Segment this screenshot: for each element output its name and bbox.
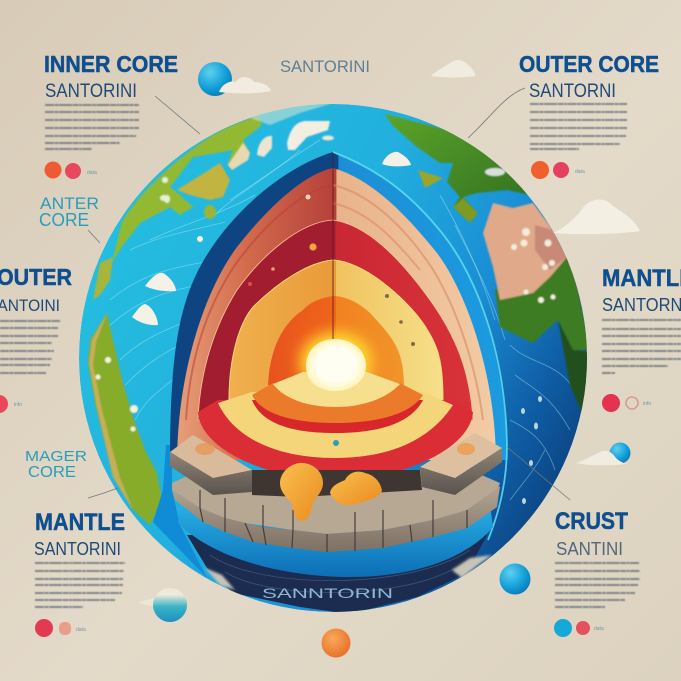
floating label: SANTORINI	[280, 57, 370, 76]
lower stone ring: top surface	[172, 470, 500, 534]
dark bowl	[187, 535, 487, 614]
subheading: SANTORNI	[529, 81, 616, 102]
mantle outer: peach layer	[177, 168, 496, 460]
icons	[602, 394, 651, 412]
icon: sea ball	[138, 588, 187, 622]
magma blob: right	[330, 472, 382, 505]
continent: left	[88, 313, 162, 525]
stone block joints	[200, 490, 467, 552]
panel: crust	[554, 508, 640, 637]
peach layer stripes	[186, 185, 483, 420]
icons	[0, 395, 22, 413]
panel: outer left	[0, 264, 72, 413]
label: anter core	[39, 194, 99, 230]
stone block: upper right	[420, 433, 502, 495]
panel: outer core	[519, 51, 659, 179]
icons: data	[575, 169, 585, 175]
magma blob: left	[280, 463, 323, 521]
engraved label: SANNTORIN	[262, 585, 393, 601]
icon: blue ball	[500, 564, 530, 594]
bowl texture	[210, 550, 470, 593]
polar ice	[250, 104, 334, 157]
subheading: SANTINI	[556, 539, 623, 559]
panel: mantle left	[34, 509, 125, 637]
icon: orange ball	[322, 628, 350, 658]
globe	[79, 104, 590, 614]
icon: cloud top	[431, 60, 475, 78]
blue plate	[178, 505, 493, 577]
label: anter core: ANTER	[40, 194, 99, 213]
core glow	[300, 332, 372, 392]
icon: ball with cloud right	[576, 442, 630, 465]
ocean	[79, 104, 587, 612]
leader lines	[88, 88, 570, 500]
icons: data	[594, 626, 604, 632]
body lines	[45, 105, 139, 149]
heading: INNER CORE	[44, 51, 178, 77]
heading: OUTER CORE	[519, 51, 659, 77]
subheading: SANTORINI	[45, 81, 137, 102]
arch: blue layer	[170, 152, 507, 460]
mantle inner: red layer	[198, 220, 473, 420]
icons: info	[643, 401, 651, 407]
panel: inner core	[44, 51, 178, 179]
core	[306, 339, 366, 391]
floor: red ring	[198, 400, 473, 470]
heading: CRUST	[555, 508, 628, 535]
label: mager core	[25, 448, 87, 481]
heading: MANTLE	[35, 509, 125, 536]
continent: upper left	[93, 116, 262, 300]
clouds on globe	[132, 152, 411, 325]
red layer specks	[248, 194, 317, 286]
centre seam	[332, 153, 334, 340]
outer core: yellow layer	[229, 260, 443, 400]
body lines	[35, 563, 125, 607]
ocean wave texture	[105, 140, 575, 500]
subheading: SANTORINI	[34, 539, 121, 559]
continent: upper right	[385, 114, 530, 223]
floor: orange ring side	[252, 400, 423, 433]
floor speck	[333, 440, 339, 446]
icon: cloud right	[553, 199, 640, 234]
body lines	[555, 563, 640, 607]
panel: mantle right	[602, 265, 681, 412]
body lines	[602, 320, 681, 373]
stone band: middle	[252, 470, 422, 497]
label: mager core: MAGER	[25, 448, 87, 465]
inner core: orange layer	[268, 296, 404, 385]
arch edge highlight	[333, 152, 507, 540]
icon: blue ball with cloud	[198, 62, 271, 96]
floor: yellow ring	[218, 392, 453, 458]
body lines	[0, 321, 60, 373]
specks on dark ocean	[521, 396, 542, 504]
icons: data	[87, 170, 97, 176]
body lines	[530, 104, 627, 149]
blue side panel	[153, 445, 207, 578]
continent: right	[483, 203, 590, 420]
yellow layer specks	[385, 294, 415, 346]
floor: inner yellow	[273, 372, 400, 407]
icons: info	[14, 402, 22, 408]
floor: orange ring	[252, 383, 423, 423]
label: anter core: CORE	[39, 210, 89, 230]
torn bowl edges	[205, 555, 492, 590]
icons: data	[76, 627, 86, 633]
lower stone ring: front	[172, 486, 500, 552]
stone block: upper left	[170, 435, 252, 495]
label: mager core: CORE	[28, 464, 76, 481]
